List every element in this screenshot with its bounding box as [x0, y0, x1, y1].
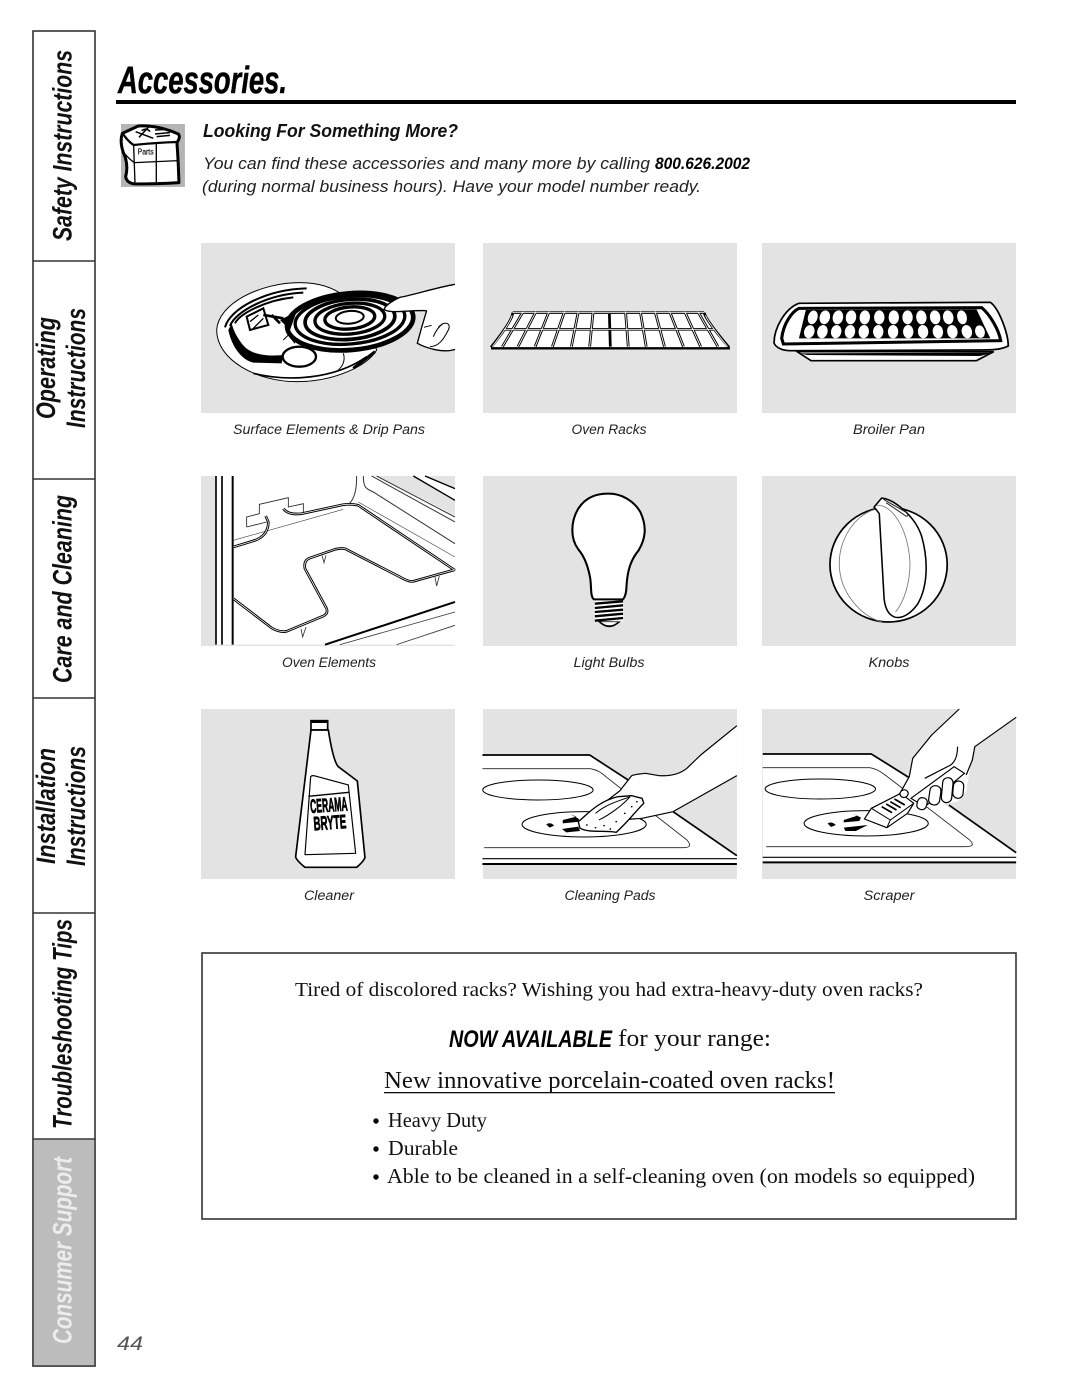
panel: surface elements and drip pans — [201, 243, 455, 413]
bullet list — [373, 1108, 975, 1188]
label: cleaner: Cleaner — [304, 888, 355, 903]
hand with sponge — [590, 726, 737, 820]
panel: cleaner: CERAMA — [310, 794, 348, 818]
tab label: troubleshooting tips: Troubleshooting Tips — [48, 919, 78, 1129]
panel: broiler pan — [762, 243, 1016, 413]
mounting bracket — [247, 498, 303, 527]
tab label: safety instructions: Safety Instructions — [48, 50, 78, 241]
callout line: now available: for your range: — [618, 1026, 771, 1052]
panel: cleaning pads — [482, 709, 737, 879]
intro text: (during normal business hours). Have your model number ready. — [202, 177, 701, 196]
bullet list: Durable — [388, 1136, 458, 1160]
tab label: consumer support: Consumer Support — [48, 1156, 78, 1344]
sidebar navigation tabs — [31, 31, 95, 1366]
page number: 44 — [117, 1334, 143, 1355]
tab label: care and cleaning: Care and Cleaning — [48, 495, 78, 683]
icon: parts box — [121, 124, 185, 187]
hand with scraper — [900, 709, 1016, 808]
bake element — [233, 504, 455, 632]
tab label: installation: Installation — [31, 748, 61, 864]
panel: light bulbs — [483, 476, 737, 646]
panel: cleaner — [201, 709, 455, 879]
label: light bulbs: Light Bulbs — [574, 655, 645, 670]
coil element — [285, 288, 416, 355]
title rule — [116, 100, 1016, 104]
drip pan — [217, 283, 377, 382]
label: knobs: Knobs — [868, 655, 910, 670]
heading: looking for something more: Looking For Something More? — [203, 121, 458, 141]
icon: parts box: Parts — [138, 146, 154, 156]
label: oven racks: Oven Racks — [572, 422, 647, 437]
callout line: now available: NOW AVAILABLE — [449, 1026, 613, 1053]
title: Accessories. — [117, 60, 287, 102]
hand — [384, 284, 455, 351]
tab label: installation instructions: Instructions — [61, 746, 91, 866]
panel: cleaner: BRYTE — [313, 812, 347, 835]
callout line: now available — [449, 1026, 771, 1053]
tab label: operating: Operating — [31, 317, 61, 419]
label: surface elements and drip pans: Surface Elements & Drip Pans — [233, 422, 425, 437]
callout line: new racks: New innovative porcelain-coated oven racks! — [384, 1067, 835, 1094]
intro text: 800.626.2002 — [655, 154, 750, 173]
intro text: You can find these accessories and many more by calling — [203, 154, 651, 173]
label: cleaning pads: Cleaning Pads — [564, 888, 656, 903]
callout box: new porcelain racks — [202, 953, 1016, 1219]
tab label: operating instructions: Instructions — [61, 308, 91, 428]
intro text — [202, 154, 750, 196]
label: scraper: Scraper — [864, 888, 915, 903]
panel: scraper — [762, 709, 1016, 879]
callout line: question: Tired of discolored racks? Wishing you had extra-heavy-duty oven racks? — [295, 979, 923, 1001]
tab: consumer support background — [33, 1139, 95, 1366]
label: broiler pan: Broiler Pan — [853, 422, 925, 437]
panel: knobs — [762, 476, 1016, 646]
bullet list: Heavy Duty — [388, 1108, 487, 1132]
panel: oven racks — [483, 243, 737, 413]
bullet list: Able to be cleaned in a self-cleaning oven (on models so equipped) — [387, 1164, 975, 1188]
panel: oven elements — [201, 476, 455, 646]
label: oven elements: Oven Elements — [282, 655, 376, 670]
